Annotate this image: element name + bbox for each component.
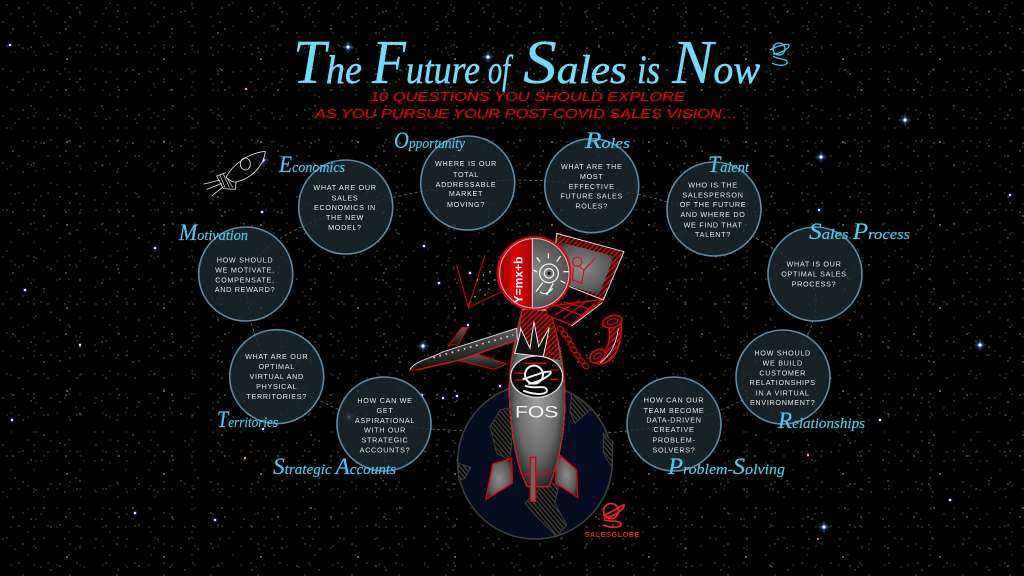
panel: strategic accounts question: ASPIRATIONAL — [355, 416, 415, 425]
panel: opportunity question — [421, 136, 515, 230]
panel: economics question: MODEL? — [328, 223, 362, 232]
heading: Problem-Solving: Problem-Solving — [667, 454, 786, 479]
panel: relationships question: WE BUILD — [763, 359, 803, 368]
heading: Economics: Economics — [278, 152, 345, 177]
panel: talent question: WHO IS THE — [688, 180, 738, 189]
panel: economics question: ECONOMICS IN — [314, 203, 376, 212]
laptop — [547, 233, 624, 326]
panel: talent question: AND WHERE DO — [680, 210, 746, 219]
globe — [458, 384, 613, 539]
panel: problem-solving question: HOW CAN OUR — [644, 396, 704, 405]
panel: territories question: VIRTUAL AND — [249, 372, 304, 381]
panel: roles question: ROLES? — [575, 202, 608, 211]
panel: economics question: THE NEW — [326, 213, 364, 222]
rocket fins — [486, 452, 578, 499]
heading: Roles: Roles — [584, 128, 630, 153]
panel: motivation question: HOW SHOULD — [217, 255, 273, 264]
panel: roles question — [545, 139, 639, 233]
icon: cyan globe logo — [770, 43, 789, 65]
panel: problem-solving question: PROBLEM- — [652, 435, 696, 444]
panel: opportunity question: ADDRESSABLE — [436, 180, 496, 189]
panel: sales process question: WHAT IS OUR — [787, 259, 841, 268]
panel: problem-solving question: SOLVERS? — [652, 445, 696, 454]
helmet head with formula and light bulb: Y=mx+b — [511, 257, 525, 303]
panel: talent question — [667, 162, 761, 256]
airplane — [410, 327, 517, 370]
logo: SalesGlobe: SALESGLOBE — [584, 530, 640, 539]
FOS label on rocket: FOS — [515, 402, 558, 421]
panel: territories question: TERRITORIES? — [246, 392, 307, 401]
panel: relationships question — [736, 330, 830, 424]
title: is — [637, 47, 660, 92]
heading: Relationships: Relationships — [777, 408, 865, 433]
panel: motivation question: COMPENSATE, — [215, 275, 275, 284]
panel: opportunity question: MOVING? — [447, 200, 485, 209]
panel: sales process question — [768, 227, 862, 321]
logo: SalesGlobe — [584, 504, 640, 539]
helmet head with formula and light bulb — [496, 237, 570, 309]
panel: opportunity question: TOTAL — [453, 170, 479, 179]
panel: territories question: PHYSICAL — [256, 382, 297, 391]
panel: opportunity question: WHERE IS OUR — [435, 159, 497, 168]
panel: motivation question: AND REWARD? — [215, 285, 275, 294]
icon: small white rocket — [204, 151, 265, 196]
rocket body — [509, 309, 565, 501]
panel: motivation question — [199, 227, 293, 321]
panel: talent question: TALENT? — [695, 230, 731, 239]
panel: relationships question: HOW SHOULD — [754, 348, 811, 357]
title: The — [293, 29, 362, 97]
panel: territories question: WHAT ARE OUR — [245, 352, 308, 361]
panel: talent question: OF THE FUTURE — [680, 200, 746, 209]
panel: problem-solving question: CREATIVE — [653, 425, 695, 434]
title: Sales — [523, 29, 627, 97]
heading: Talent: Talent — [708, 152, 750, 177]
panel: roles question: WHAT ARE THE — [561, 162, 622, 171]
panel: talent question: WE FIND THAT — [684, 220, 742, 229]
line chart icon — [457, 255, 502, 308]
panel: problem-solving question: DATA-DRIVEN — [646, 416, 702, 425]
dashed orbit — [246, 180, 816, 436]
panel: economics question — [299, 160, 393, 254]
panel: strategic accounts question: WITH OUR — [364, 425, 406, 434]
panel: relationships question: RELATIONSHIPS — [750, 378, 816, 387]
panel: sales process question: OPTIMAL SALES — [781, 270, 847, 279]
panel: strategic accounts question: ACCOUNTS? — [360, 445, 410, 454]
heading: Motivation: Motivation — [178, 220, 248, 245]
subtitle: AS YOU PURSUE YOUR POST-COVID SALES VISION… — [314, 107, 738, 121]
panel: strategic accounts question: HOW CAN WE — [357, 396, 413, 405]
panel: strategic accounts question — [337, 377, 431, 471]
illustration: globe and rocket figure — [410, 233, 624, 539]
panel: relationships question: IN A VIRTUAL — [756, 388, 810, 397]
heading: Opportunity: Opportunity — [394, 128, 465, 153]
heading: Strategic Accounts: Strategic Accounts — [273, 454, 396, 479]
panel: strategic accounts question: GET — [377, 406, 393, 415]
panel: relationships question: CUSTOMER — [759, 368, 806, 377]
title: of — [488, 47, 513, 92]
panel: roles question: EFFECTIVE — [569, 182, 615, 191]
heading: Territories: Territories — [217, 407, 278, 432]
panel: economics question: WHAT ARE OUR — [313, 183, 377, 192]
heading: Sales Process: Sales Process — [809, 219, 910, 244]
panel: sales process question: PROCESS? — [792, 279, 836, 288]
panel: territories question — [230, 330, 324, 424]
panel: roles question: FUTURE SALES — [560, 192, 623, 201]
panel: relationships question: ENVIRONMENT? — [750, 398, 815, 407]
panel: roles question: MOST — [580, 172, 603, 181]
panel: opportunity question: MARKET — [449, 189, 483, 198]
subtitle: 10 QUESTIONS YOU SHOULD EXPLORE — [370, 90, 686, 104]
panel: territories question: OPTIMAL — [258, 362, 295, 371]
panel: motivation question: WE MOTIVATE, — [215, 265, 275, 274]
subtitle — [314, 90, 738, 121]
panel: strategic accounts question: STRATEGIC — [362, 436, 408, 445]
panel: talent question: SALESPERSON — [682, 190, 744, 199]
porthole logo — [511, 356, 563, 397]
title — [293, 29, 760, 97]
panel: problem-solving question — [627, 377, 721, 471]
phone with coiled cord — [556, 313, 624, 370]
panel: problem-solving question: TEAM BECOME — [644, 406, 704, 415]
panel: economics question: SALES — [332, 194, 358, 202]
title: Future — [371, 29, 480, 97]
title: Now — [671, 29, 760, 97]
